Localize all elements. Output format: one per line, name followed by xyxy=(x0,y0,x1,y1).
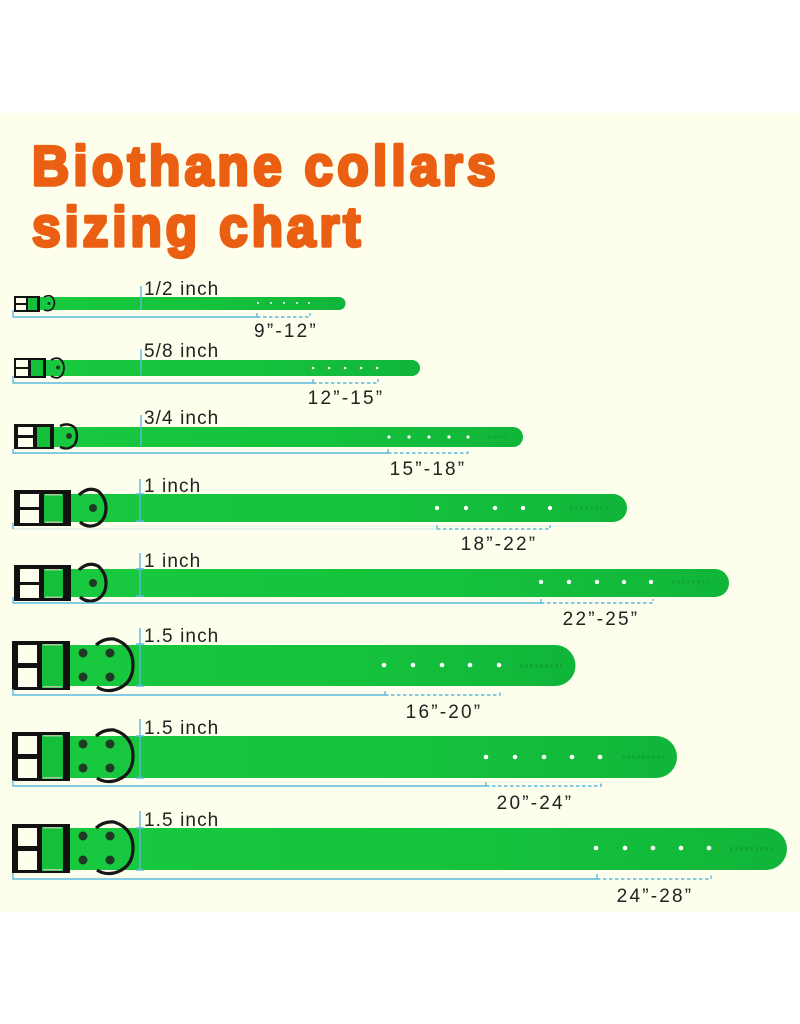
collar 2: 5/8 inch, 12-15: 12”-15” xyxy=(308,388,384,409)
collar 3: 3/4 inch, 15-18: 3/4 inch xyxy=(144,408,219,429)
collar 6: 1.5 inch, 16-20 xyxy=(12,626,576,723)
collar 2: 5/8 inch, 12-15 xyxy=(13,341,420,409)
collar 5: 1 inch, 22-25 xyxy=(13,551,729,630)
title xyxy=(32,135,496,258)
collar 7: 1.5 inch, 20-24 xyxy=(12,718,677,814)
collar 1: 1/2 inch, 9-12 xyxy=(13,279,346,342)
collar 8: 1.5 inch, 24-28: 24”-28” xyxy=(617,886,693,907)
collar 8: 1.5 inch, 24-28: 1.5 inch xyxy=(144,810,219,831)
collar 8: 1.5 inch, 24-28 xyxy=(12,810,787,907)
collar 1: 1/2 inch, 9-12: 9”-12” xyxy=(254,321,318,342)
collar 1: 1/2 inch, 9-12: 1/2 inch xyxy=(144,279,219,300)
collar 5: 1 inch, 22-25: 22”-25” xyxy=(563,609,639,630)
cream background panel xyxy=(0,113,800,912)
title: sizing chart xyxy=(32,196,361,258)
collar 3: 3/4 inch, 15-18 xyxy=(13,408,523,480)
collar 2: 5/8 inch, 12-15: 5/8 inch xyxy=(144,341,219,362)
collar 4: 1 inch, 18-22: 1 inch xyxy=(144,476,201,497)
collar 4: 1 inch, 18-22 xyxy=(13,476,627,555)
collar 5: 1 inch, 22-25: 1 inch xyxy=(144,551,201,572)
collar 4: 1 inch, 18-22: 18”-22” xyxy=(461,534,537,555)
collar 6: 1.5 inch, 16-20: 1.5 inch xyxy=(144,626,219,647)
collar 7: 1.5 inch, 20-24: 20”-24” xyxy=(497,793,573,814)
collar 7: 1.5 inch, 20-24: 1.5 inch xyxy=(144,718,219,739)
title: Biothane collars xyxy=(32,135,496,197)
collar 6: 1.5 inch, 16-20: 16”-20” xyxy=(406,702,482,723)
collar 3: 3/4 inch, 15-18: 15”-18” xyxy=(390,459,466,480)
